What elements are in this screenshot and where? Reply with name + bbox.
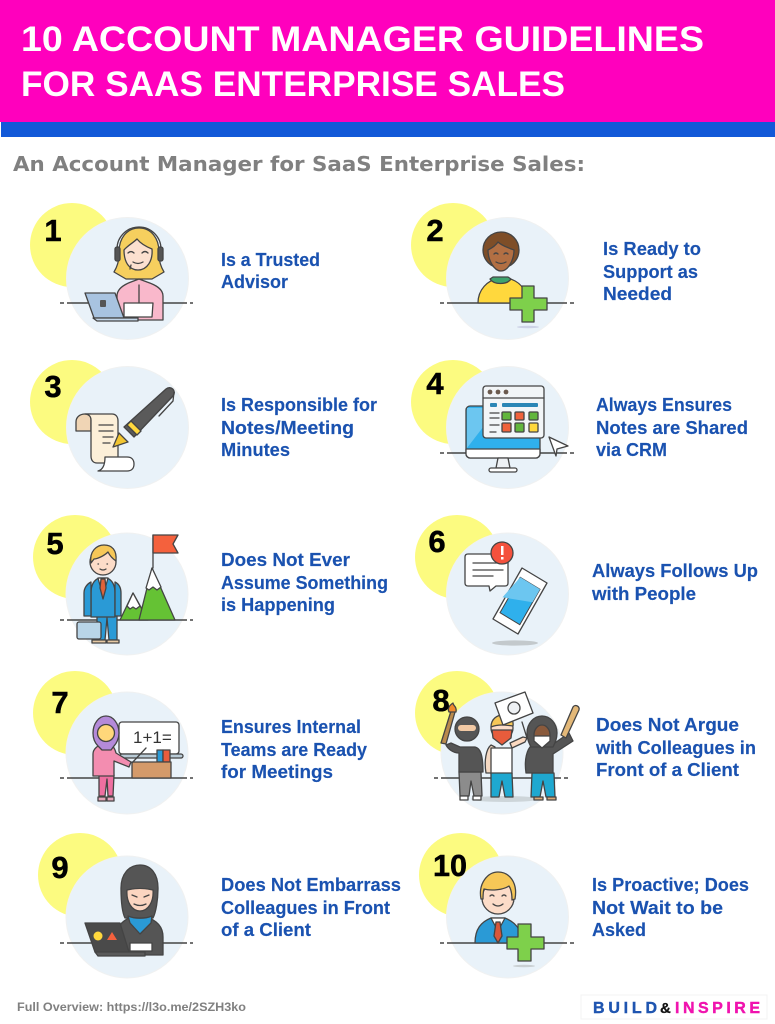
text block: for Meetings (221, 762, 333, 782)
text block (596, 395, 748, 460)
text block: Does Not Embarrass (221, 875, 401, 895)
logo: Build & Inspire (581, 995, 767, 1019)
text block (603, 239, 701, 304)
panel: guideline 8 (415, 671, 756, 814)
logo: Build & Inspire: & (660, 1000, 671, 1017)
icon: businessman with mountain and flag (77, 535, 178, 643)
text block: Support as (603, 262, 698, 282)
title: FOR SAAS ENTERPRISE SALES (21, 65, 565, 104)
text block: with People (591, 584, 696, 604)
text block (221, 250, 320, 292)
subtitle: An Account Manager for SaaS Enterprise Sales: (13, 152, 585, 176)
text block: Is Proactive; Does (592, 875, 749, 895)
text block: via CRM (596, 440, 667, 460)
number: 8 (432, 683, 450, 718)
title (21, 20, 704, 104)
panel: guideline 2 (411, 203, 701, 340)
logo: Build & Inspire: INSPIRE (675, 1000, 760, 1017)
panel: guideline 3 (30, 360, 377, 488)
text block (221, 395, 377, 460)
panel: guideline 4 (411, 360, 748, 488)
text block (221, 550, 388, 615)
text block (595, 715, 756, 780)
number: 7 (51, 685, 69, 720)
number: 6 (428, 524, 446, 559)
title: 10 ACCOUNT MANAGER GUIDELINES (21, 20, 704, 59)
text block: Advisor (221, 272, 288, 292)
header banner (0, 0, 775, 137)
text block (221, 717, 367, 782)
panel: guideline 7 (33, 671, 367, 814)
text block: Does Not Argue (596, 715, 739, 735)
text block: Asked (592, 920, 646, 940)
panel: guideline 9 (38, 833, 401, 978)
text block: Does Not Ever (221, 550, 350, 570)
icon: desktop monitor with app window and cursor (466, 386, 568, 472)
number: 4 (426, 366, 444, 401)
text block: Always Follows Up (592, 561, 758, 581)
icon: chat bubble alert and smartphone (465, 542, 547, 646)
number: 1 (44, 213, 62, 248)
number: 10 (433, 848, 467, 883)
text block: Front of a Client (596, 760, 739, 780)
panel: guideline 5 (33, 515, 388, 655)
footer source link: Full Overview: https://l3o.me/2SZH3ko (17, 1000, 246, 1014)
text block (221, 875, 401, 940)
text block: Notes are Shared (596, 418, 748, 438)
icon: smiling businessman with plus (475, 872, 544, 967)
text block: Assume Something (221, 573, 388, 593)
text block: Colleagues in Front (221, 898, 390, 918)
text block: is Happening (221, 595, 335, 615)
icon: three masked protesters (441, 692, 579, 800)
icon: scroll and fountain pen (76, 388, 174, 471)
icon: teacher at whiteboard: 1+1= (133, 728, 172, 747)
text block: Is a Trusted (221, 250, 320, 270)
logo: Build & Inspire: BUILD (593, 1000, 657, 1017)
text block: Needed (603, 284, 672, 304)
text block: Is Ready to (603, 239, 701, 259)
text block: Teams are Ready (221, 740, 367, 760)
text block: Ensures Internal (221, 717, 361, 737)
text block (591, 561, 758, 604)
number: 5 (46, 526, 64, 561)
icon: smiling man with plus (478, 232, 547, 328)
number: 3 (44, 369, 62, 404)
panel: guideline 10 (419, 833, 749, 978)
icon: woman with headset and laptop (85, 227, 164, 321)
text block: Notes/Meeting (221, 418, 354, 438)
icon: teacher at whiteboard (93, 716, 183, 801)
text block: Not Wait to be (592, 898, 723, 918)
text block (592, 875, 749, 940)
text block: with Colleagues in (595, 738, 756, 758)
panel: guideline 6 (415, 515, 758, 655)
text block: Always Ensures (596, 395, 732, 415)
text block: Is Responsible for (221, 395, 377, 415)
number: 2 (426, 213, 444, 248)
panel: guideline 1 (30, 203, 320, 340)
number: 9 (51, 850, 69, 885)
icon: hooded figure with laptop (85, 865, 163, 956)
text block: of a Client (221, 920, 311, 940)
text block: Minutes (221, 440, 290, 460)
